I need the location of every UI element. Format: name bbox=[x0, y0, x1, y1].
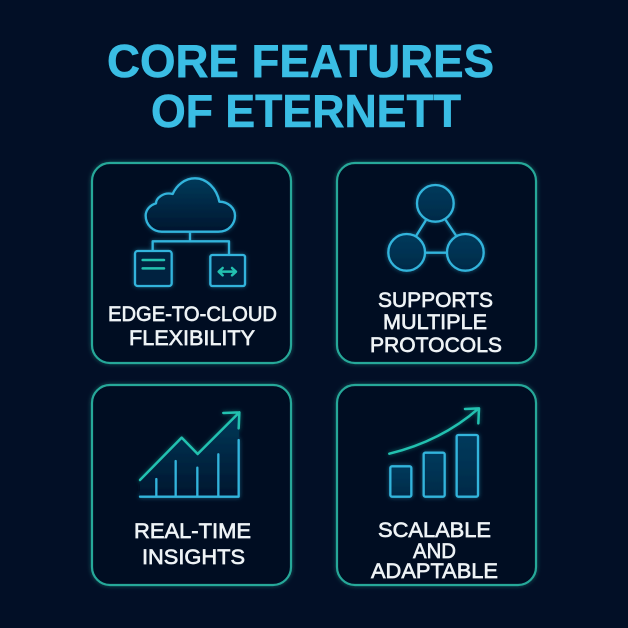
label: supports multiple protocols: MULTIPLE bbox=[383, 311, 487, 334]
label: scalable and adaptable: ADAPTABLE bbox=[371, 560, 498, 583]
label: edge-to-cloud flexibility: EDGE-TO-CLOUD bbox=[108, 303, 277, 326]
panel: real-time insights bbox=[92, 385, 291, 585]
label: real-time insights: REAL-TIME bbox=[134, 520, 251, 543]
title bbox=[107, 35, 494, 137]
label: scalable and adaptable bbox=[371, 519, 498, 583]
title: OF ETERNETT bbox=[151, 85, 461, 137]
icon: connected nodes bbox=[388, 185, 484, 271]
icon: rising bars with arrow bbox=[389, 408, 479, 497]
label: real-time insights bbox=[134, 520, 251, 569]
label: scalable and adaptable: AND bbox=[413, 540, 456, 563]
label: supports multiple protocols: SUPPORTS bbox=[378, 289, 493, 312]
label: edge-to-cloud flexibility: FLEXIBILITY bbox=[129, 327, 255, 350]
panel: scalable and adaptable bbox=[337, 385, 536, 585]
icon: line and bar chart bbox=[140, 412, 239, 497]
label: scalable and adaptable: SCALABLE bbox=[378, 519, 491, 542]
panel: edge-to-cloud flexibility bbox=[92, 163, 291, 363]
icon: cloud hierarchy bbox=[135, 178, 245, 286]
title: CORE FEATURES bbox=[107, 35, 494, 87]
label: supports multiple protocols: PROTOCOLS bbox=[370, 334, 502, 357]
label: edge-to-cloud flexibility bbox=[108, 303, 277, 350]
panel: supports multiple protocols bbox=[337, 163, 536, 363]
label: real-time insights: INSIGHTS bbox=[142, 546, 245, 569]
label: supports multiple protocols bbox=[370, 289, 502, 357]
